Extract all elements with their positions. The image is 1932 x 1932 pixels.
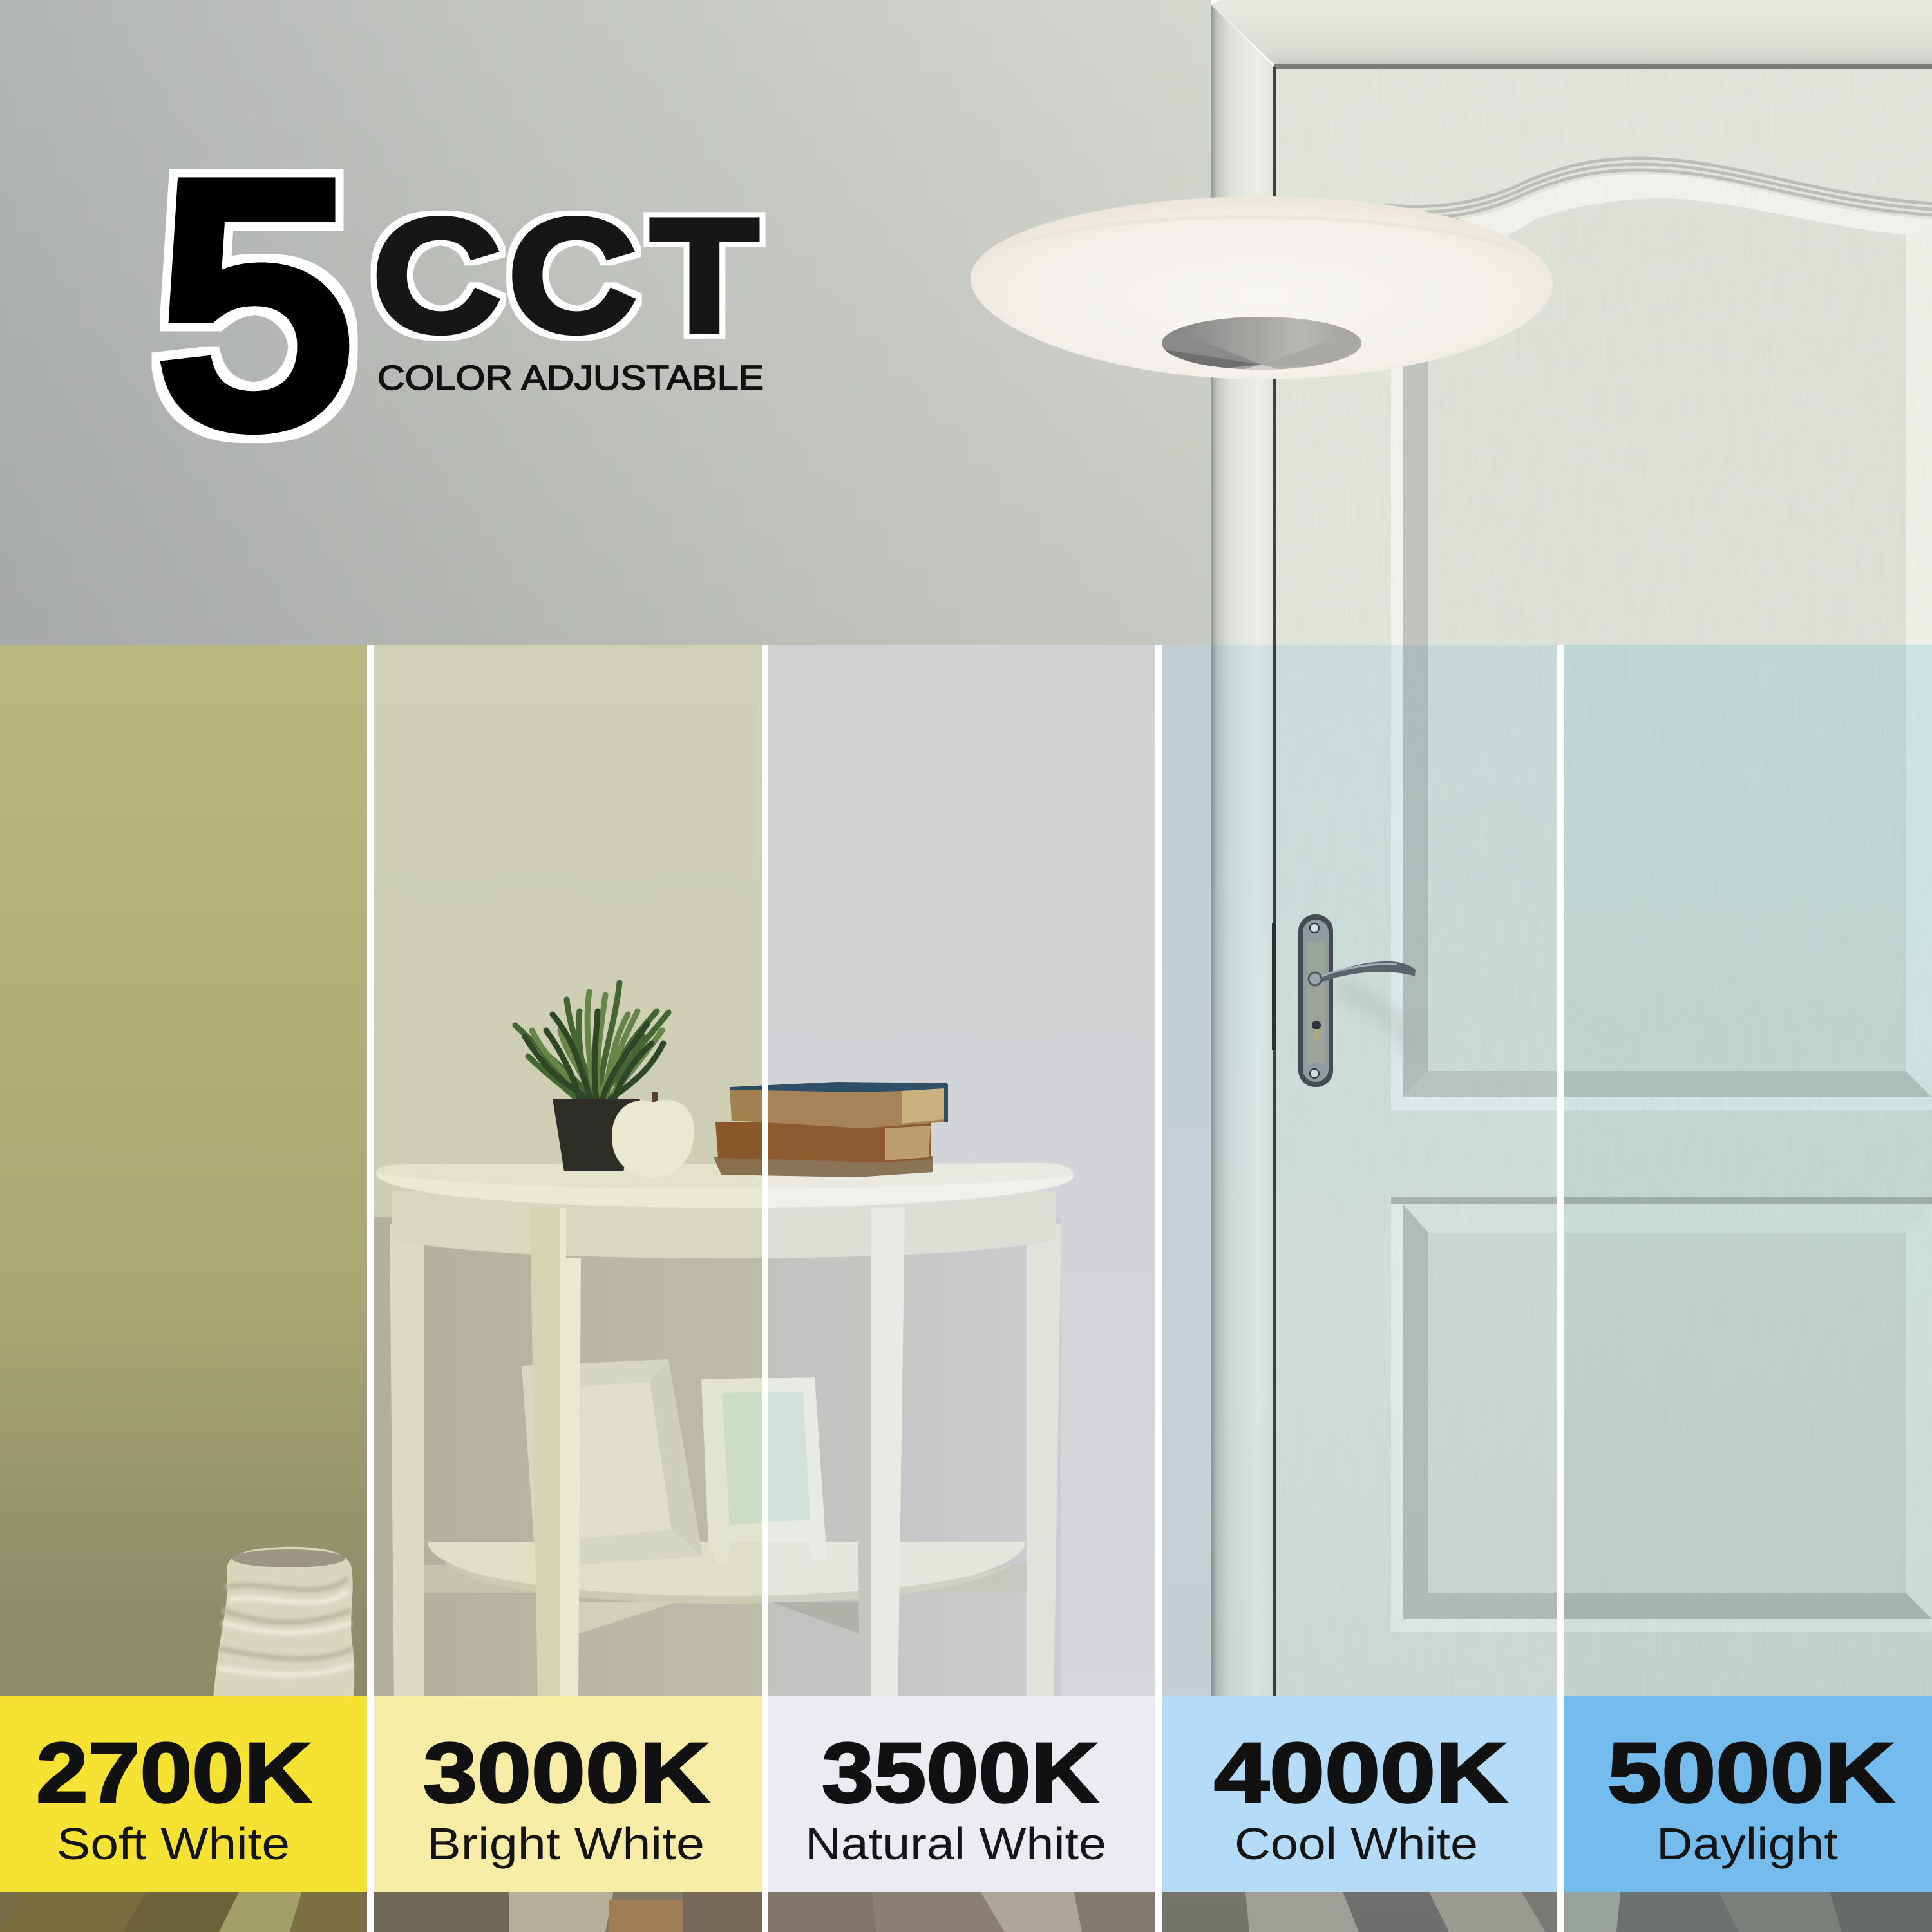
handle lever [1309, 961, 1416, 985]
door head casing [1211, 0, 1932, 64]
vase [213, 1547, 354, 1707]
picture frame left [522, 1359, 703, 1567]
console table with objects [374, 983, 1074, 1707]
back left leg [390, 1224, 424, 1707]
lamp diffuser [971, 196, 1553, 379]
middle book [715, 1121, 931, 1162]
colour bar: 3500K Natural White [768, 1696, 1155, 1892]
label Daylight: Daylight [1656, 1819, 1838, 1869]
wood floor strip [0, 1868, 1932, 1932]
lower shelf back rail [424, 1565, 1027, 1593]
back right leg [1027, 1224, 1061, 1707]
ceramic apple [612, 1092, 694, 1177]
table apron [392, 1191, 1056, 1258]
colour bar: 5000K Daylight [1564, 1696, 1932, 1892]
picture frame right [701, 1377, 827, 1564]
shadow wall under table [374, 1217, 1061, 1707]
label Soft White: Soft White [57, 1819, 290, 1869]
value 3000K: 3000K [423, 1725, 710, 1820]
stack of books [714, 1082, 948, 1177]
colour bar: 3000K Bright White [374, 1696, 762, 1892]
plant leaves [515, 983, 668, 1099]
white divider lines [367, 645, 1564, 1932]
upper door panel [1391, 174, 1932, 1110]
lamp center nickel cap [1162, 317, 1361, 370]
front right leg [856, 1208, 905, 1707]
door slab [1274, 64, 1932, 1932]
headline: 5 CCT [158, 113, 764, 495]
door arch groove lines [1385, 158, 1932, 218]
value 5000K: 5000K [1607, 1725, 1895, 1820]
colour temperature overlay: 3500K [768, 645, 1155, 1932]
colour bar: 4000K Cool White [1162, 1696, 1557, 1892]
value 4000K: 4000K [1214, 1725, 1508, 1820]
front left leg [530, 1208, 581, 1707]
brace right [772, 1602, 860, 1634]
label Natural White: Natural White [805, 1819, 1106, 1869]
value 2700K: 2700K [36, 1725, 312, 1820]
lower door panel [1391, 1197, 1932, 1632]
plant [515, 983, 668, 1171]
colour bar: 2700K Soft White [0, 1696, 367, 1892]
door handle [1272, 914, 1416, 1087]
label Bright White: Bright White [427, 1819, 705, 1869]
value 3500K: 3500K [822, 1725, 1099, 1820]
handle backplate [1298, 914, 1333, 1087]
big numeral 5: 5 [158, 113, 354, 495]
door frame side casing [1211, 5, 1274, 1932]
lower shelf [428, 1542, 1025, 1602]
bottom book [714, 1156, 933, 1177]
label Cool White: Cool White [1235, 1819, 1478, 1869]
colour temperature overlay: 4000K [1162, 645, 1557, 1932]
CCT heading: CCT [375, 191, 756, 360]
plant pot [553, 1099, 640, 1171]
background wall, upper photo area [0, 0, 1211, 645]
top book [730, 1082, 948, 1128]
subtitle: COLOR ADJUSTABLE [377, 359, 764, 397]
colour temperature overlay: 5000K [1564, 645, 1932, 1932]
door frame and door [1211, 0, 1932, 1932]
brace left [578, 1602, 676, 1634]
wood grain texture [1275, 69, 1932, 1932]
ceiling lamp [971, 196, 1553, 379]
wall panel: 3000K zone [374, 645, 768, 1932]
colour temperature overlay: 2700K [0, 645, 367, 1932]
colour temperature overlay: 3000K [374, 645, 762, 1932]
table top [376, 1163, 1074, 1208]
wall panel: 2700K zone [0, 645, 374, 1932]
wall panel: 3500K and 4000K zone [768, 645, 1211, 1932]
